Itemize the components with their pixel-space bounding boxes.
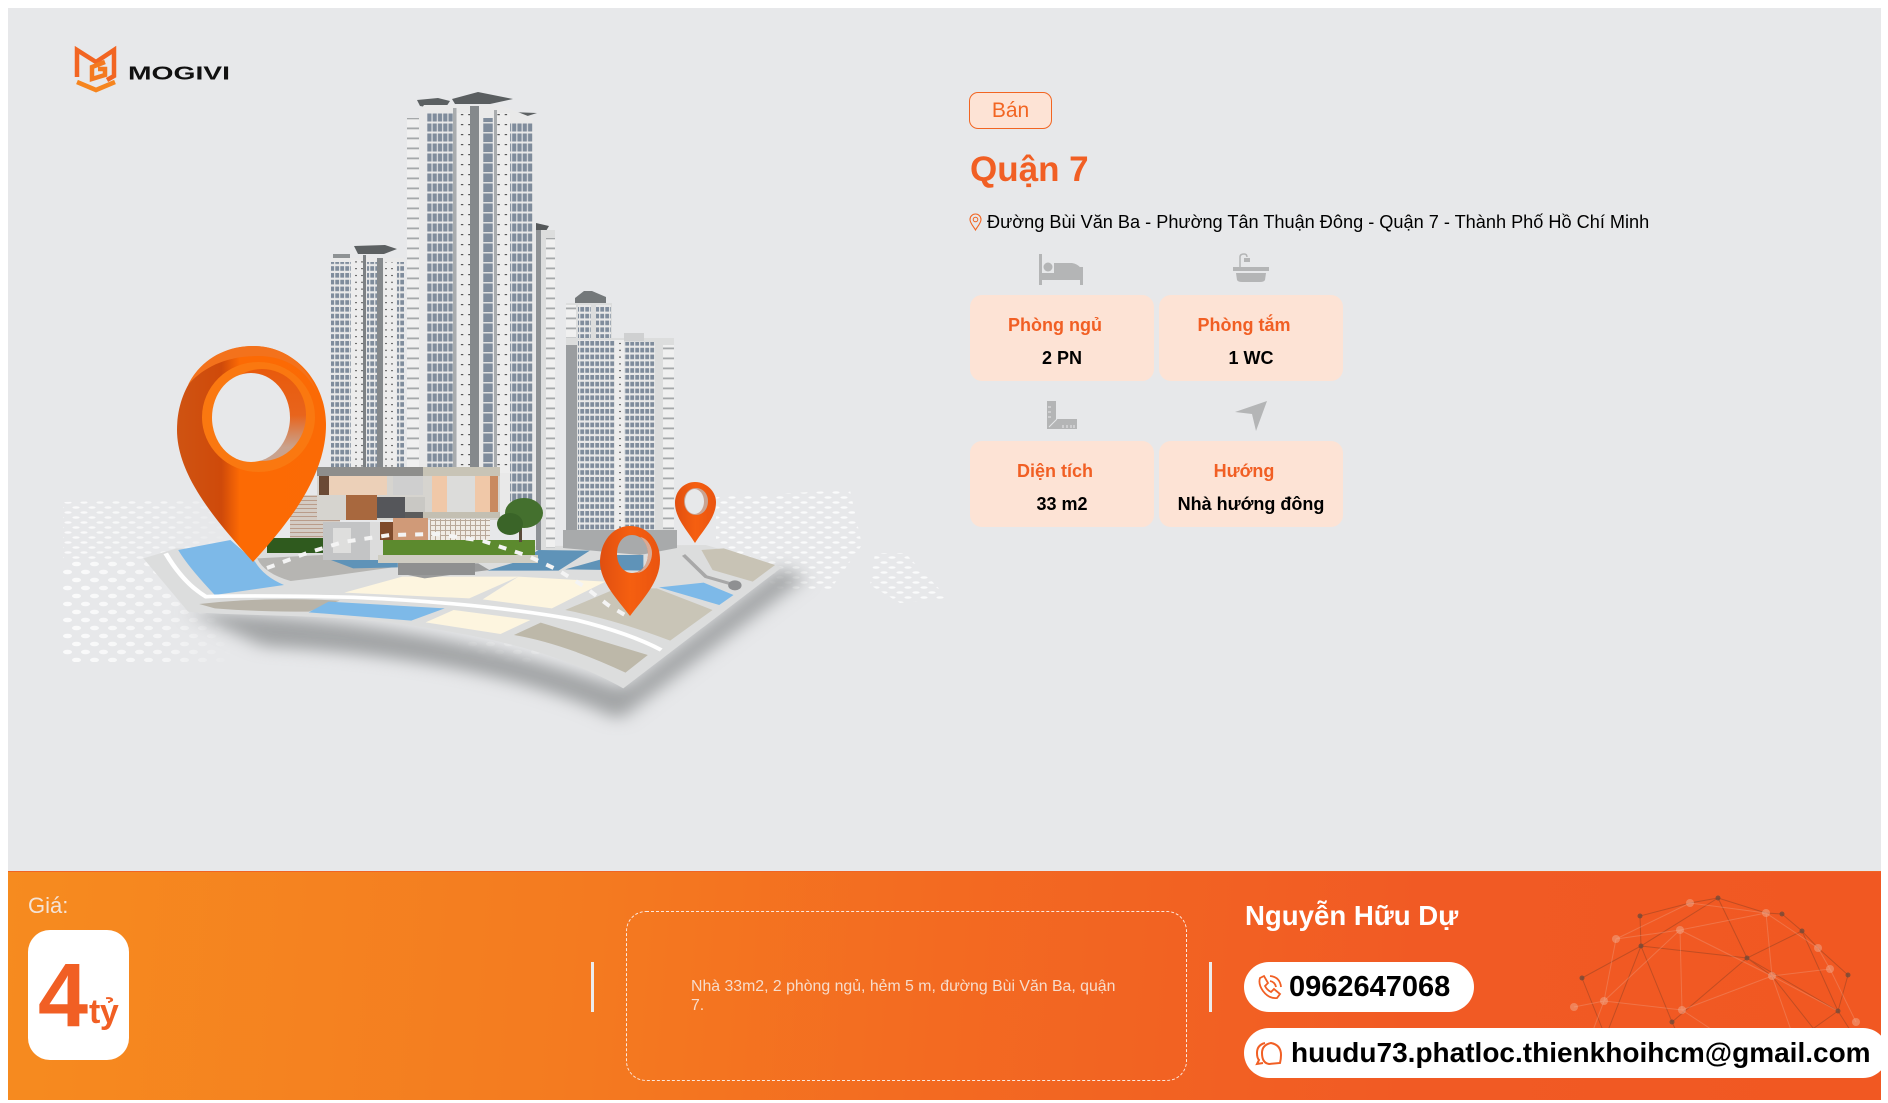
network sphere decoration <box>1570 896 1860 1028</box>
tower: far right lower <box>566 333 674 543</box>
phone pill <box>1244 962 1474 1012</box>
card: bathrooms: 1 WC <box>1228 348 1274 368</box>
pin: large <box>177 346 326 562</box>
phone number: 0962647068 <box>1289 971 1450 1003</box>
footer band <box>8 871 1881 1100</box>
description text: Nhà 33m2, 2 phòng ngủ, hẻm 5 m, đường Bùi Văn Ba, quận 7. <box>691 978 1115 1014</box>
price number: 4 <box>38 946 88 1046</box>
pin: medium <box>600 526 660 616</box>
decorative halftone dots <box>63 490 948 664</box>
tree <box>497 498 543 542</box>
card: bathrooms <box>1159 295 1343 381</box>
logo wordmark: MOGIVI <box>128 62 230 84</box>
icon: location pin <box>969 214 982 231</box>
card: direction: Nhà hướng đông <box>1178 494 1324 514</box>
tower: far right upper <box>566 291 612 343</box>
card: bedrooms <box>970 295 1154 381</box>
card: bathrooms: Phòng tắm <box>1198 315 1290 335</box>
price unit: tỷ <box>89 993 118 1031</box>
icon: navigation arrow <box>1235 401 1267 431</box>
agent name: Nguyễn Hữu Dự <box>1245 900 1458 931</box>
pin: small <box>675 482 716 543</box>
icon: bathtub <box>1233 253 1269 282</box>
map with roads and plots <box>143 540 804 720</box>
card: bedrooms: 2 PN <box>1042 348 1082 368</box>
badge: Bán: Bán <box>992 99 1029 122</box>
card: direction: Hướng <box>1214 461 1274 481</box>
card: area: 33 m2 <box>1036 494 1088 514</box>
panel: property background <box>8 8 1881 871</box>
price label: Giá: <box>28 893 68 918</box>
email address: huudu73.phatloc.thienkhoihcm@gmail.com <box>1291 1037 1871 1068</box>
tower: left <box>331 245 404 470</box>
card: bedrooms: Phòng ngủ <box>1008 315 1102 335</box>
card: direction <box>1159 441 1343 527</box>
tower: center <box>407 92 537 518</box>
logo <box>77 50 230 90</box>
card: area: Diện tích <box>1017 461 1093 481</box>
dashed route <box>267 534 625 615</box>
address: Đường Bùi Văn Ba - Phường Tân Thuận Đông - Quận 7 - Thành Phố Hồ Chí Minh <box>987 212 1649 232</box>
icon: chat <box>1255 1042 1282 1066</box>
email pill <box>1244 1028 1888 1078</box>
description box <box>626 911 1187 1081</box>
icon: set square <box>1047 401 1077 429</box>
icon: bed <box>1039 254 1083 285</box>
badge: Bán <box>969 92 1052 129</box>
card: area <box>970 441 1154 527</box>
price box <box>28 930 129 1060</box>
icon: phone <box>1258 974 1282 999</box>
tower group <box>331 92 677 555</box>
divider <box>591 962 594 1012</box>
divider <box>1209 962 1212 1012</box>
tower: right side slab <box>536 223 555 550</box>
title: district: Quận 7 <box>970 150 1089 189</box>
logo mark <box>77 50 115 90</box>
house <box>267 467 538 575</box>
base podium of right towers <box>563 530 677 555</box>
